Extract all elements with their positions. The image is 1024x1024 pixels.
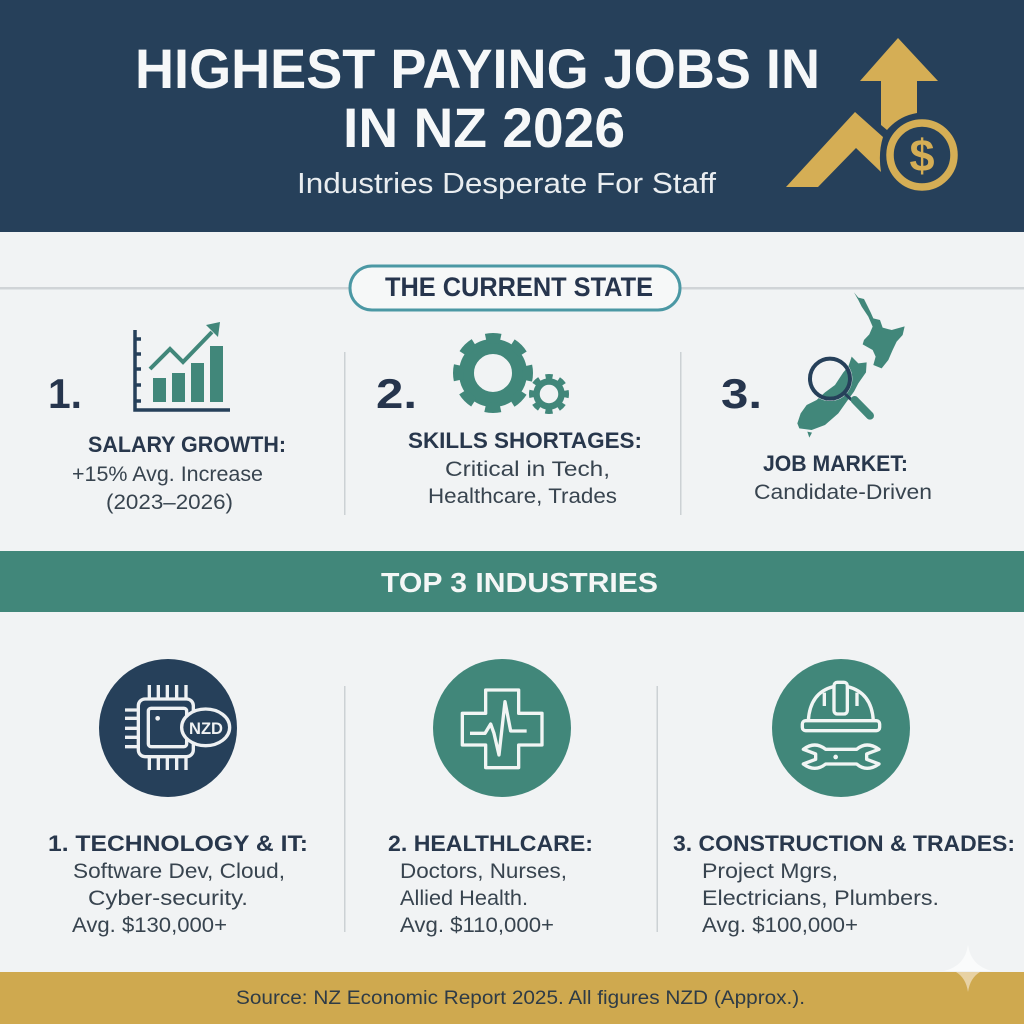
construction text: Electricians, Plumbers. [702, 887, 939, 910]
panel: construction and trades [673, 659, 1015, 937]
panel: healthcare [388, 659, 593, 937]
icon: gears [458, 338, 566, 411]
title: IN NZ 2026 [343, 96, 625, 159]
icon: hard hat and wrench [772, 659, 910, 797]
section banner: top 3 industries: TOP 3 INDUSTRIES [381, 567, 658, 598]
panel: technology and IT [48, 659, 308, 937]
icon: NZ map with magnifying glass [797, 292, 905, 438]
construction text: Avg. $100,000+ [702, 914, 858, 937]
healthcare text [388, 831, 593, 937]
healthcare text: Allied Health. [400, 887, 528, 910]
construction text: 3. CONSTRUCTION & TRADES: [673, 831, 1015, 856]
footer source bar [0, 972, 1024, 1024]
healthcare text: Doctors, Nurses, [400, 860, 567, 883]
construction text: Project Mgrs, [702, 860, 838, 883]
icon: gold arrow and dollar coin: $ [909, 130, 935, 181]
title: HIGHEST PAYING JOBS IN [135, 37, 820, 100]
salary growth text: (2023–2026) [106, 491, 233, 514]
salary growth text [72, 432, 286, 514]
salary growth text: +15% Avg. Increase [72, 463, 263, 486]
healthcare text: Avg. $110,000+ [400, 914, 554, 937]
skills shortages text: Critical in Tech, [445, 458, 610, 481]
title [135, 37, 820, 159]
job market text: JOB MARKET: [763, 451, 908, 476]
subtitle: Industries Desperate For Staff [297, 168, 717, 200]
section heading: the current state [0, 266, 1024, 310]
section heading: the current state: THE CURRENT STATE [385, 272, 653, 302]
technology text [48, 831, 308, 937]
technology text: Cyber-security. [88, 887, 248, 910]
section banner: top 3 industries [0, 551, 1024, 612]
icon: gold arrow and dollar coin [786, 38, 954, 187]
technology text: Avg. $130,000+ [72, 914, 227, 937]
technology text: 1. TECHNOLOGY & IT: [48, 831, 308, 856]
panel: skills shortages [376, 338, 642, 508]
skills shortages text [408, 428, 642, 508]
number 2: 2. [376, 370, 417, 417]
icon: medical cross with pulse [433, 659, 571, 797]
header banner [0, 0, 1024, 232]
skills shortages text: SKILLS SHORTAGES: [408, 428, 642, 453]
panel: salary growth [48, 322, 286, 514]
job market text [754, 451, 932, 504]
salary growth text: SALARY GROWTH: [88, 432, 286, 457]
icon: bar chart with rising arrow [135, 322, 230, 410]
technology text: Software Dev, Cloud, [73, 860, 285, 883]
decorative sparkle [944, 945, 992, 992]
healthcare text: 2. HEALTHLCARE: [388, 831, 593, 856]
panel: job market [721, 292, 932, 504]
number 1: 1. [48, 370, 82, 417]
skills shortages text: Healthcare, Trades [428, 485, 617, 508]
job market text: Candidate-Driven [754, 481, 932, 504]
construction text [673, 831, 1015, 937]
number 3: 3. [721, 370, 762, 417]
icon: circuit chip with NZD badge [99, 659, 237, 797]
footer source bar: Source: NZ Economic Report 2025. All figures NZD (Approx.). [236, 988, 805, 1009]
icon: circuit chip with NZD badge: NZD [189, 720, 223, 738]
